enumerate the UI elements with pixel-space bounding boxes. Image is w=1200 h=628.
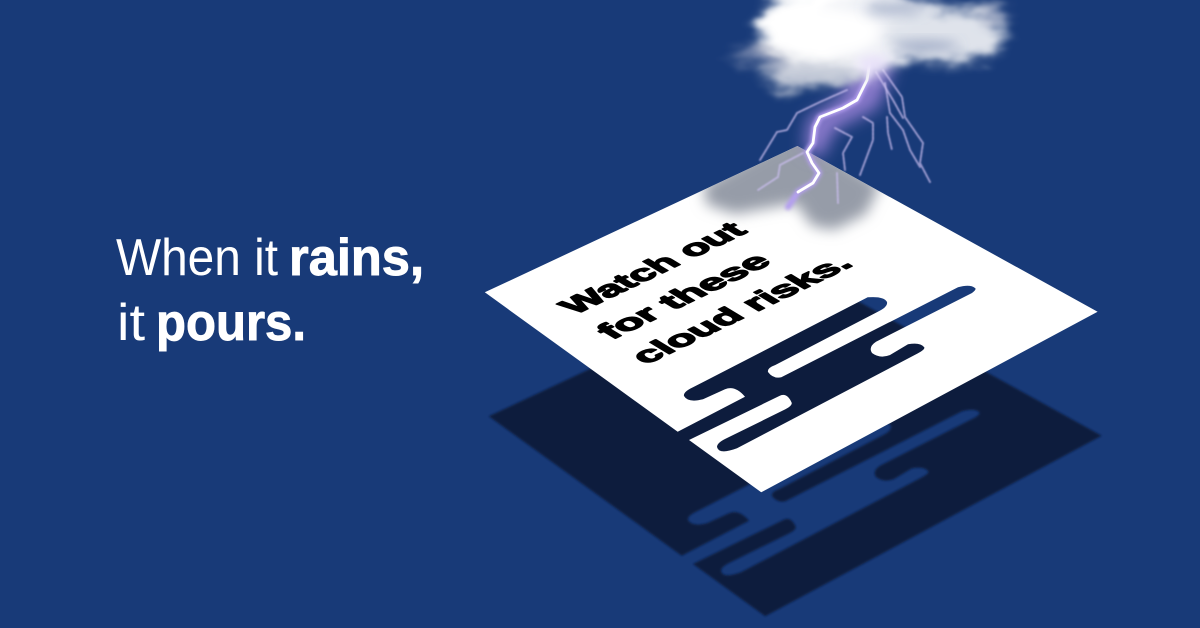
card heading: for these (588, 248, 779, 344)
cloud body (732, 0, 1007, 88)
cloud highlights and shade (776, 8, 880, 56)
card heading (551, 217, 860, 369)
lightning glow (804, 58, 895, 158)
headline: it (117, 294, 146, 352)
headline: When it (116, 229, 278, 287)
card heading: cloud risks. (622, 251, 860, 369)
cloud shadow on card (704, 130, 880, 230)
card shadow (489, 270, 1102, 616)
storm cloud (732, 0, 1007, 88)
headline: pours. (156, 294, 306, 352)
lightning (758, 58, 930, 207)
lightning branches (758, 70, 930, 203)
headline: rains, (289, 229, 424, 287)
white card with drip cut-outs (485, 146, 1098, 492)
main lightning bolt (788, 60, 870, 207)
card heading: Watch out (551, 217, 754, 319)
headline (116, 229, 424, 352)
